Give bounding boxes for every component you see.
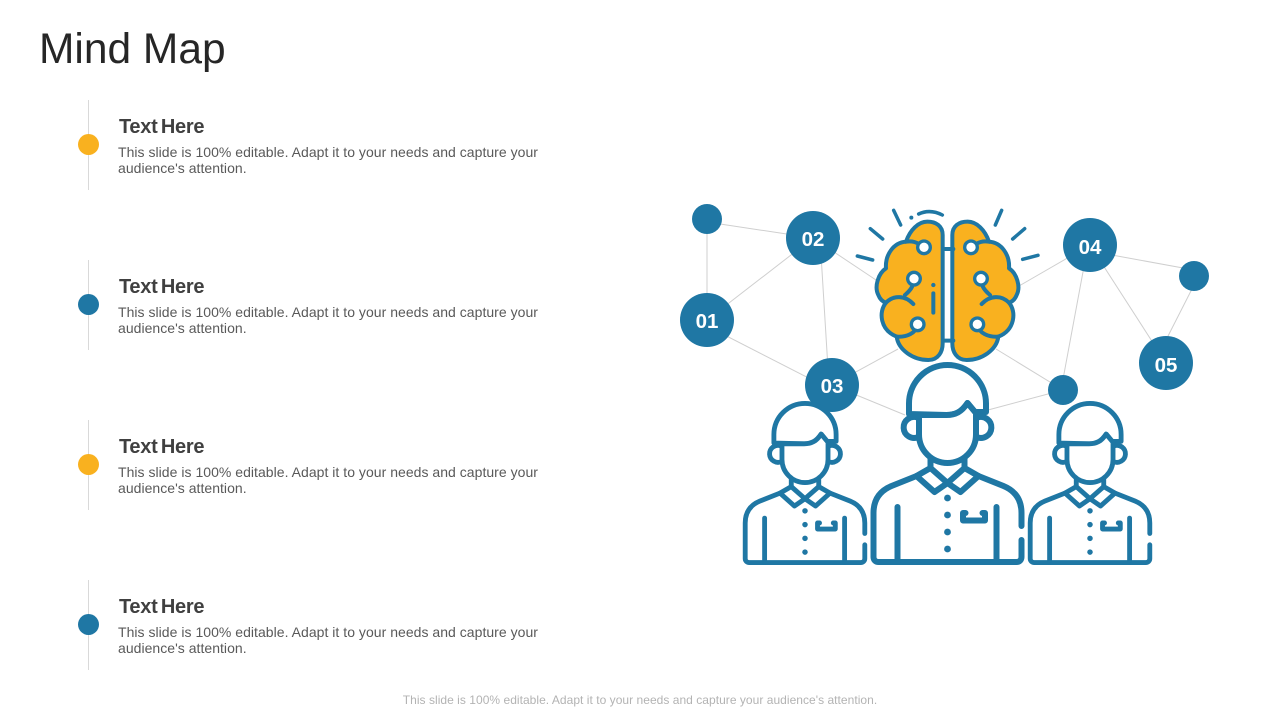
brain right hemisphere (952, 222, 1018, 360)
brain inner marks and bridges (931, 249, 953, 341)
heading 3: Text Here (119, 436, 204, 458)
network connector lines (707, 219, 1194, 415)
heading 1: Text Here (119, 116, 204, 138)
idea rays (857, 210, 1038, 260)
body text 1 (118, 144, 538, 176)
marker dot 3 (78, 454, 99, 475)
small node centre (1048, 375, 1078, 405)
title: Mind Map (39, 26, 226, 73)
node 03: 03 (821, 375, 843, 398)
list item 4 (78, 580, 538, 670)
body text 2: This slide is 100% editable. Adapt it to your needs and capture your (118, 304, 538, 320)
node 03 (805, 358, 859, 412)
list item 2 (78, 260, 538, 350)
footer note: This slide is 100% editable. Adapt it to your needs and capture your audience's attention. (403, 693, 877, 707)
body text 4: audience's attention. (118, 640, 247, 656)
heading 2: Text Here (119, 276, 204, 298)
body text 1: This slide is 100% editable. Adapt it to your needs and capture your (118, 144, 538, 160)
body text 3: audience's attention. (118, 480, 247, 496)
body text 3: This slide is 100% editable. Adapt it to your needs and capture your (118, 464, 538, 480)
heading 4: Text Here (119, 596, 204, 618)
body text 4: This slide is 100% editable. Adapt it to your needs and capture your (118, 624, 538, 640)
list item 1 (78, 100, 538, 190)
icon: brain (857, 210, 1038, 360)
node 04 (1063, 218, 1117, 272)
body text 2 (118, 304, 538, 336)
node 02 (786, 211, 840, 265)
small node right (1179, 261, 1209, 291)
node 05 (1139, 336, 1193, 390)
small node top left (692, 204, 722, 234)
node 01 (680, 293, 734, 347)
brain left hemisphere (877, 222, 943, 360)
node 02: 02 (802, 228, 824, 251)
marker dot 4 (78, 614, 99, 635)
node 01: 01 (696, 310, 718, 333)
body text 1: audience's attention. (118, 160, 247, 176)
icon: person left (745, 403, 865, 563)
list item 3 (78, 420, 538, 510)
icon: person right (1030, 403, 1150, 563)
node 05: 05 (1155, 354, 1177, 377)
marker dot 2 (78, 294, 99, 315)
body text 4 (118, 624, 538, 656)
icon: person centre (874, 365, 1022, 562)
marker dot 1 (78, 134, 99, 155)
body text 3 (118, 464, 538, 496)
node 04: 04 (1079, 236, 1102, 259)
body text 2: audience's attention. (118, 320, 247, 336)
